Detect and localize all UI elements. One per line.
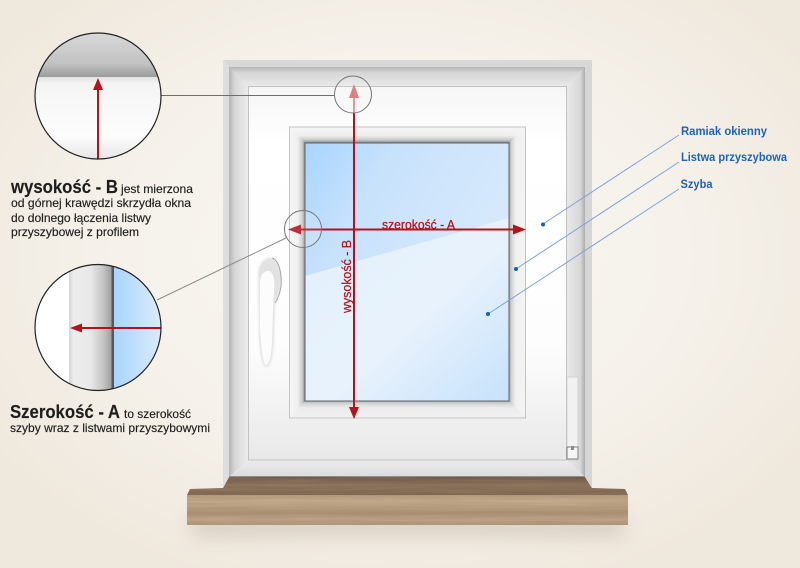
window hinge <box>567 377 578 460</box>
window sash <box>248 86 566 460</box>
small circle: side marker <box>284 210 322 248</box>
window handle <box>258 258 281 367</box>
window illustration <box>187 60 628 535</box>
text block: height explanation: od górnej krawędzi skrzydła okna <box>11 196 191 210</box>
detail circle: top edge <box>34 33 162 160</box>
window reveal frame <box>223 60 592 488</box>
callout: Listwa przyszybowa: Listwa przyszybowa <box>681 150 787 164</box>
small circle: top marker <box>334 76 372 113</box>
callout: Szyba: Szyba <box>680 177 713 191</box>
window sill <box>187 477 628 535</box>
width measurement arrow <box>288 224 526 234</box>
callout line: side detail <box>157 238 286 300</box>
detail circle: side edge <box>34 264 162 392</box>
text block: height explanation: wysokość - B <box>10 177 118 197</box>
text block: height explanation: przyszybowej z profilem <box>11 225 139 239</box>
glass pane <box>305 143 509 401</box>
text block: width explanation: szyby wraz z listwami przyszybowymi <box>10 421 210 435</box>
text block: width explanation <box>10 402 210 435</box>
callout: Ramiak okienny <box>541 124 767 226</box>
text block: height explanation <box>10 177 193 239</box>
text block: width explanation: to szerokość <box>124 407 191 421</box>
height label: wysokość - B <box>339 240 354 314</box>
text block: width explanation: Szerokość - A <box>10 402 120 422</box>
callout: Ramiak okienny: Ramiak okienny <box>681 124 767 138</box>
width label: szerokość - A <box>382 217 455 232</box>
height measurement arrow <box>349 84 359 419</box>
text block: height explanation: do dolnego łączenia listwy <box>11 211 151 225</box>
callout: Listwa przyszybowa <box>514 150 787 271</box>
callout line: top detail <box>161 94 334 96</box>
callout: Szyba <box>486 177 713 316</box>
text block: height explanation: jest mierzona <box>120 182 193 196</box>
glazing bead <box>289 126 526 418</box>
